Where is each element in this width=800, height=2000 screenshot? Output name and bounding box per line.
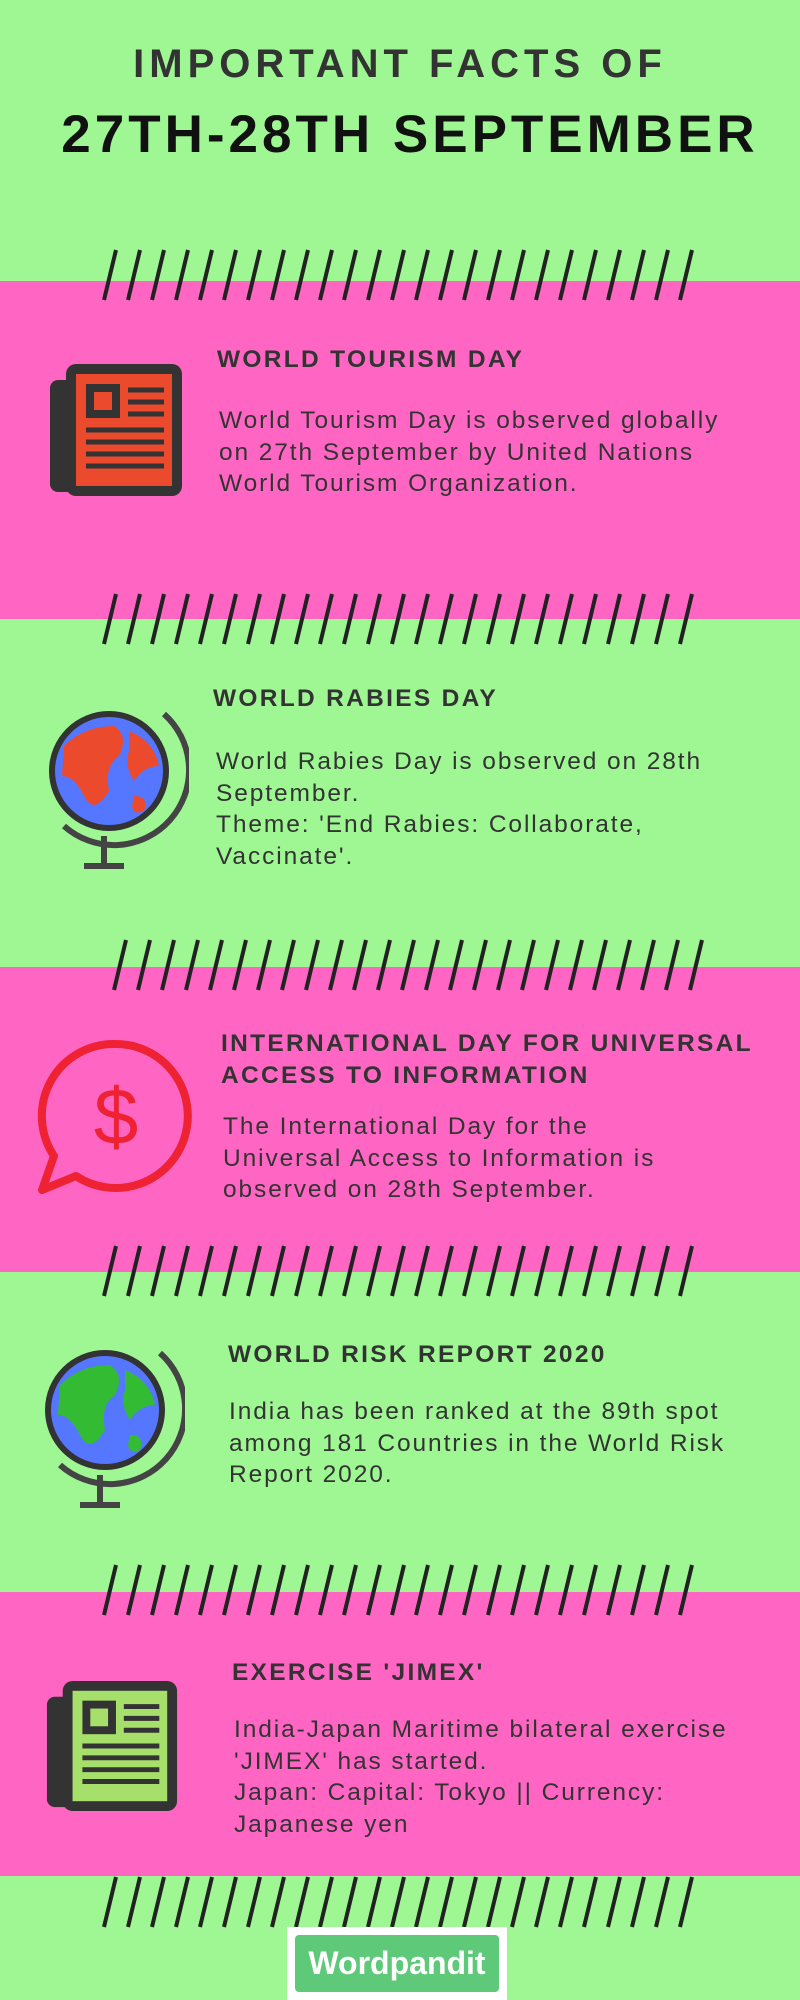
text 2: Vaccinate'.: [216, 842, 354, 870]
icon: newspaper green: [46, 1681, 178, 1811]
text 2: World Rabies Day is observed on 28th: [216, 748, 702, 775]
text 1: on 27th September by United Nations: [219, 438, 694, 466]
text 3: observed on 28th September.: [223, 1176, 596, 1203]
slashes row 2: [102, 594, 694, 644]
text 5: 'JIMEX' has started.: [234, 1748, 488, 1774]
text 1: [219, 407, 719, 497]
text 4: among 181 Countries in the World Risk: [229, 1430, 725, 1456]
icon: dollar speech bubble: $: [94, 1072, 138, 1161]
text 1: World Tourism Day is observed globally: [219, 407, 719, 434]
text 5: India-Japan Maritime bilateral exercise: [234, 1716, 728, 1743]
text 3: The International Day for the: [223, 1113, 589, 1140]
heading 3: ACCESS TO INFORMATION: [221, 1062, 590, 1089]
text 3: Universal Access to Information is: [223, 1144, 655, 1172]
title: 27TH-28TH SEPTEMBER: [61, 105, 759, 164]
icon: globe red: [49, 711, 189, 869]
heading 5: EXERCISE 'JIMEX': [232, 1659, 485, 1686]
text 4: India has been ranked at the 89th spot: [229, 1398, 719, 1425]
slashes row 4: [102, 1246, 694, 1296]
slashes row 5: [102, 1564, 694, 1616]
slashes row 3: [112, 940, 704, 990]
icon: globe green: [45, 1350, 185, 1508]
heading 3: INTERNATIONAL DAY FOR UNIVERSAL: [221, 1030, 753, 1057]
text 4: Report 2020.: [229, 1461, 393, 1488]
heading 1: WORLD TOURISM DAY: [217, 346, 524, 373]
heading 2: WORLD RABIES DAY: [213, 685, 498, 712]
heading 3: [221, 1030, 753, 1089]
text 2: [216, 748, 702, 870]
text 3: [223, 1113, 655, 1203]
logo: [287, 1927, 507, 2000]
logo: Wordpandit: [308, 1945, 486, 1981]
heading 4: WORLD RISK REPORT 2020: [228, 1341, 607, 1368]
text 4: [229, 1398, 725, 1488]
slashes row 1: [102, 250, 694, 300]
text 2: September.: [216, 780, 360, 806]
text 1: World Tourism Organization.: [219, 470, 578, 497]
icon: dollar speech bubble: [38, 1040, 192, 1194]
text 2: Theme: 'End Rabies: Collaborate,: [216, 811, 644, 838]
title: IMPORTANT FACTS OF: [133, 42, 667, 86]
text 5: Japan: Capital: Tokyo || Currency:: [234, 1779, 665, 1806]
icon: newspaper red: [50, 364, 182, 496]
text 5: Japanese yen: [234, 1810, 409, 1838]
title: [61, 42, 759, 164]
text 5: [234, 1716, 728, 1838]
slashes row 6: [102, 1876, 694, 1928]
